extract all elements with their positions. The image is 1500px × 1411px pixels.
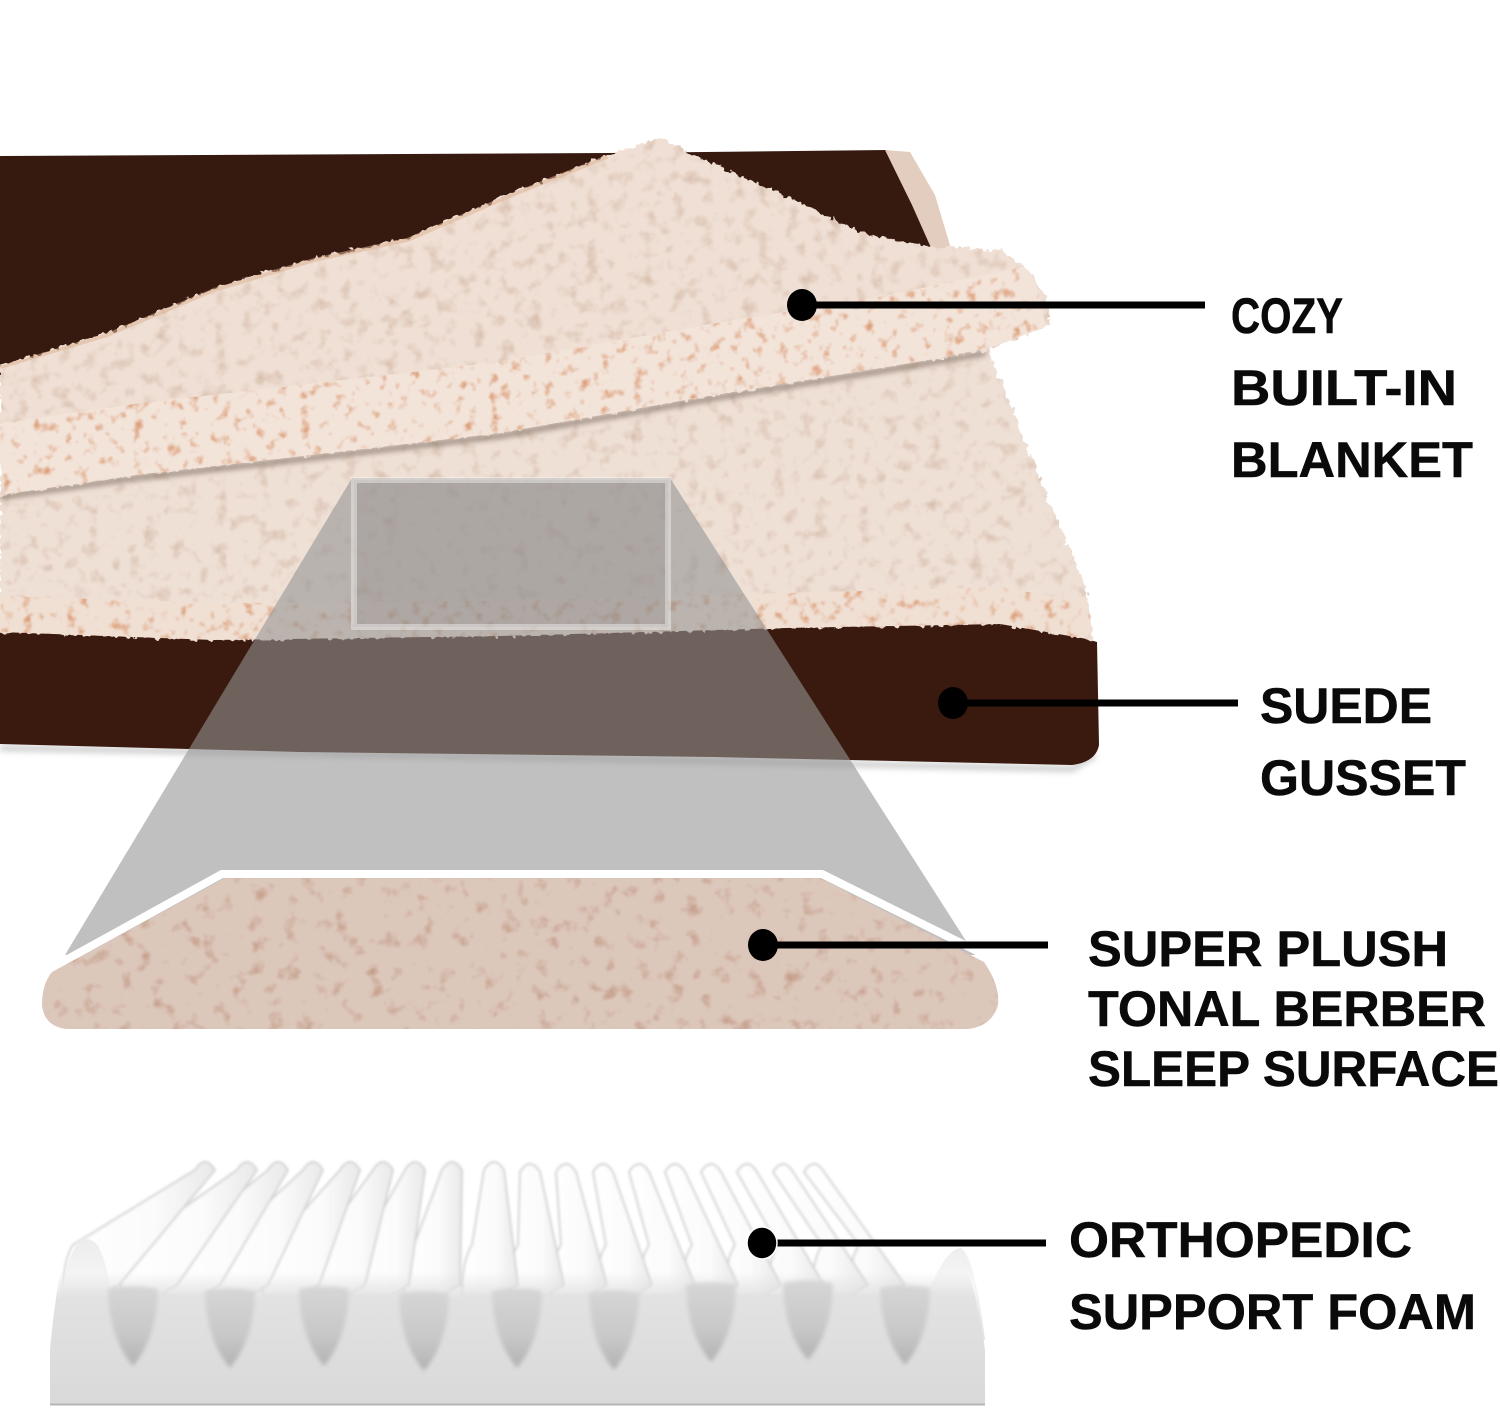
- bed: suede gusset side: [0, 615, 1099, 765]
- pointer: blanket: [802, 302, 1205, 308]
- label: gusset: SUEDE: [1260, 678, 1432, 734]
- pointer: foam: [762, 1240, 1046, 1246]
- orthopedic egg-crate foam: [50, 1162, 985, 1405]
- label: sleep surface: [1088, 921, 1499, 1097]
- label: blanket: BLANKET: [1231, 432, 1473, 488]
- label: sleep surface: SLEEP SURFACE: [1088, 1041, 1499, 1097]
- built-in blanket folded back: [0, 138, 1050, 495]
- foam: front corner peak: [60, 1239, 112, 1300]
- label: sleep surface: TONAL BERBER: [1088, 981, 1486, 1037]
- label: sleep surface: SUPER PLUSH: [1088, 921, 1448, 977]
- bed: sherpa edge flap at back corner: [885, 150, 955, 268]
- dot: gusset: [938, 687, 968, 719]
- callout: orthopedic foam: [747, 1212, 1476, 1340]
- callout: cozy built-in blanket: [787, 288, 1473, 488]
- label: foam: [1069, 1212, 1476, 1340]
- foam: rear peak rows: [63, 1162, 905, 1296]
- dot: blanket: [787, 289, 817, 321]
- label: gusset: [1260, 678, 1466, 806]
- bed: shadow under folded blanket: [0, 353, 986, 497]
- magnifier cone overlay: [65, 478, 975, 955]
- tonal berber swatch: [42, 874, 998, 1029]
- bed: brown suede top: [0, 150, 950, 380]
- magnified area frame: [354, 480, 668, 627]
- dot: foam: [747, 1227, 777, 1259]
- pointer: gusset: [953, 700, 1238, 706]
- label: blanket: COZY: [1231, 288, 1343, 344]
- label: blanket: BUILT-IN: [1231, 360, 1457, 416]
- label: gusset: GUSSET: [1260, 750, 1466, 806]
- dot: sleep surface: [748, 929, 778, 961]
- bed: sherpa top surface: [0, 340, 1093, 640]
- label: foam: ORTHOPEDIC: [1069, 1212, 1412, 1268]
- callout: sleep surface: [748, 921, 1499, 1097]
- label: foam: SUPPORT FOAM: [1069, 1284, 1476, 1340]
- foam: lower body: [50, 1272, 985, 1405]
- pointer: sleep surface: [763, 942, 1048, 948]
- callout: suede gusset: [938, 678, 1466, 806]
- foam: right end peak: [925, 1248, 985, 1340]
- bed: soft shadow beneath: [0, 748, 1095, 769]
- foam: front valleys: [108, 1280, 930, 1371]
- label: blanket: [1231, 288, 1473, 488]
- foam: bottom shadow edge: [50, 1404, 985, 1406]
